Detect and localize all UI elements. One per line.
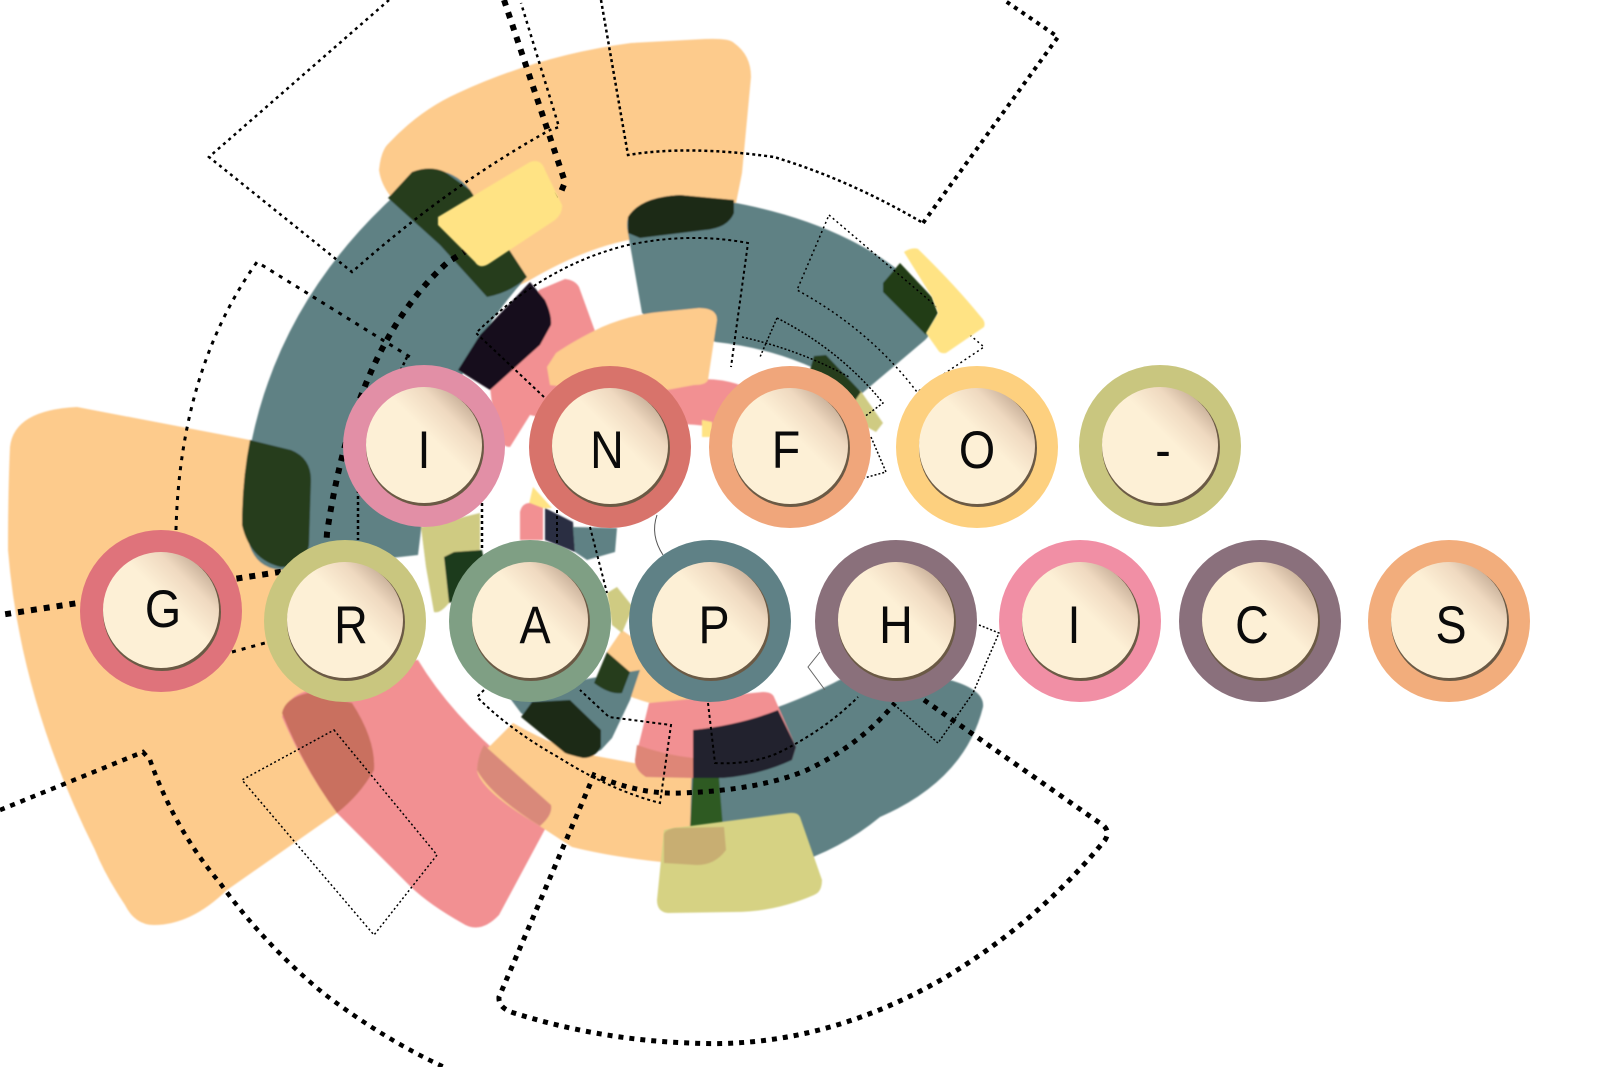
letter ring: H (815, 540, 977, 702)
coloured arc segments (8, 39, 983, 928)
arc: pink upper (490, 279, 745, 447)
dotted outline: top left (209, 0, 559, 272)
letter ring: C: C (1235, 595, 1269, 655)
dotted outline: centre (557, 510, 607, 593)
dotted outlines (0, 0, 1107, 1067)
dotted outline: right thin (797, 215, 984, 392)
arc: teal bottom right (690, 670, 983, 865)
letter ring: C (1179, 540, 1341, 702)
cluster: small blocks under N (520, 487, 617, 560)
letter ring: G: G (145, 579, 181, 639)
arc: small peach upper (547, 308, 717, 395)
letter ring: hyphen (1079, 365, 1241, 527)
letter ring: R: R (334, 595, 368, 655)
arc: large pink bottom (282, 660, 554, 928)
letter ring: G (80, 530, 242, 692)
block: yellow on top arc (438, 161, 562, 266)
dotted outline: diamond lower left (242, 730, 437, 935)
arc: inner pink lower (635, 692, 796, 778)
overlap: navy lower (693, 710, 796, 778)
letter ring: F (709, 366, 871, 528)
dotted outline: left inner (358, 357, 482, 550)
letter ring: P: P (698, 595, 730, 655)
dotted outline: thick bottom (499, 700, 1107, 1044)
overlap: pink and lower peach (477, 745, 551, 826)
letter ring: I first row: I (418, 420, 430, 480)
overlap: dark green by F (810, 355, 861, 415)
overlap: dark green band top (388, 168, 527, 297)
overlap: dark green left of A (444, 550, 490, 603)
dotted outline: thick top to left (0, 0, 565, 615)
letter ring: R (264, 540, 426, 702)
dotted outline: thick lower left (0, 752, 444, 1067)
block: olive behind F (845, 390, 883, 432)
dotted outline: top right, thick part (923, 0, 1058, 223)
arc: teal top right (627, 195, 938, 395)
arc: lower peach band (477, 723, 727, 865)
letter ring: P (629, 540, 791, 702)
letter ring: A: A (519, 595, 551, 655)
arc: large peach left (8, 407, 374, 925)
arc: teal inner bottom (506, 670, 640, 758)
overlap: dark green beside P (594, 652, 630, 693)
small diamond by H (808, 652, 825, 690)
small yellow and red tabs near F (702, 420, 712, 437)
letter ring: O: O (959, 420, 995, 480)
letter ring: N: N (590, 420, 624, 480)
arc: small peach under letters (600, 630, 720, 703)
letter ring: I second row (999, 540, 1161, 702)
thin curve in centre (655, 515, 663, 555)
block: olive left (421, 513, 480, 612)
overlap: navy upper (458, 282, 551, 390)
overlap: pink and peach (282, 693, 374, 813)
letter ring: S (1368, 540, 1530, 702)
letter ring: N (529, 366, 691, 528)
dotted outline: bottom inner (477, 690, 671, 803)
overlap: dark green inner bottom (521, 700, 601, 758)
dotted outline: top right, thin part (601, 0, 923, 223)
block: olive bottom (657, 813, 822, 913)
letter ring: I first row (343, 365, 505, 527)
block: olive right (607, 587, 633, 633)
letter ring: F: F (772, 420, 800, 480)
letter ring: H: H (879, 595, 913, 655)
letter ring: I second row: I (1068, 595, 1080, 655)
letter ring: O (896, 366, 1058, 528)
overlap: olive and peach (664, 827, 726, 865)
dotted outline: lower centre (708, 697, 858, 763)
overlap: dark green top right (628, 195, 734, 238)
letter ring: A (449, 540, 611, 702)
block: yellow right (904, 248, 985, 353)
dotted outline: inner top (476, 238, 748, 397)
overlap: green strip (690, 778, 723, 830)
letter ring: S: S (1435, 595, 1467, 655)
arc: top peach (379, 39, 751, 297)
letter ring: hyphen: - (1155, 420, 1171, 480)
overlap: inner pink and peach (635, 745, 693, 778)
arc: teal left (242, 170, 527, 570)
dotted outline: small upper right (742, 318, 886, 478)
overlap: dark green right (883, 263, 938, 335)
overlap: dark green left (242, 440, 311, 567)
dotted outline: right of H (897, 625, 999, 743)
dotted outline: left (176, 262, 410, 652)
